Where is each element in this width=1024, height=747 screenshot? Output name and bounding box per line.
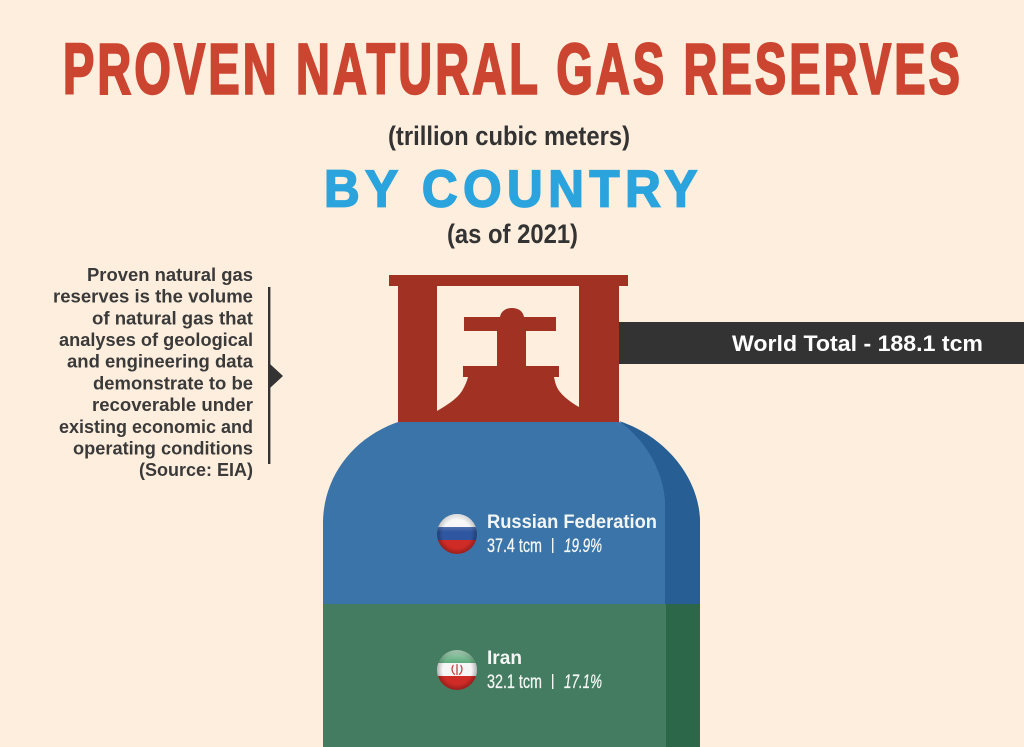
definition text block: operating conditions (73, 438, 253, 458)
label: Iran (487, 648, 602, 693)
definition text block: analyses of geological (59, 329, 253, 350)
definition text block: recoverable under (92, 394, 253, 415)
definition text block: reserves is the volume (53, 286, 253, 306)
subtitle: date: (as of 2021) (447, 219, 578, 249)
definition pointer arrow (268, 287, 283, 464)
label: Iran: 17.1% (564, 671, 602, 693)
definition text block: of natural gas that (92, 308, 253, 328)
definition text block: existing economic and (59, 416, 253, 437)
flag icon: Russia (437, 514, 477, 554)
heading: by country: BY COUNTRY (324, 159, 697, 218)
world total bar: World Total - 188.1 tcm (732, 331, 983, 356)
definition text block: and engineering data (67, 350, 254, 372)
label: Russian Federation: Russian Federation (487, 512, 657, 533)
subtitle: units: (trillion cubic meters) (388, 121, 630, 151)
flag icon: Iran (437, 650, 477, 690)
valve (389, 275, 628, 422)
definition text block (53, 264, 254, 480)
cylinder shadow: blue (619, 421, 700, 604)
cylinder section: Russian Federation (323, 422, 700, 604)
definition text block: (Source: EIA) (139, 459, 253, 480)
gas cylinder (323, 275, 700, 747)
label: Iran: 32.1 tcm (487, 671, 542, 693)
world total bar (610, 322, 1024, 364)
cylinder shadow: green (666, 604, 700, 747)
definition text block: demonstrate to be (93, 372, 253, 394)
title: PROVEN NATURAL GAS RESERVES (63, 30, 960, 109)
definition text block: Proven natural gas (87, 264, 253, 285)
label: Russian Federation: 19.9% (564, 535, 602, 557)
label: Russian Federation: 37.4 tcm (487, 535, 542, 557)
label: Iran: Iran (487, 648, 522, 669)
cylinder section: Iran (323, 604, 700, 747)
label: Russian Federation (487, 512, 657, 557)
